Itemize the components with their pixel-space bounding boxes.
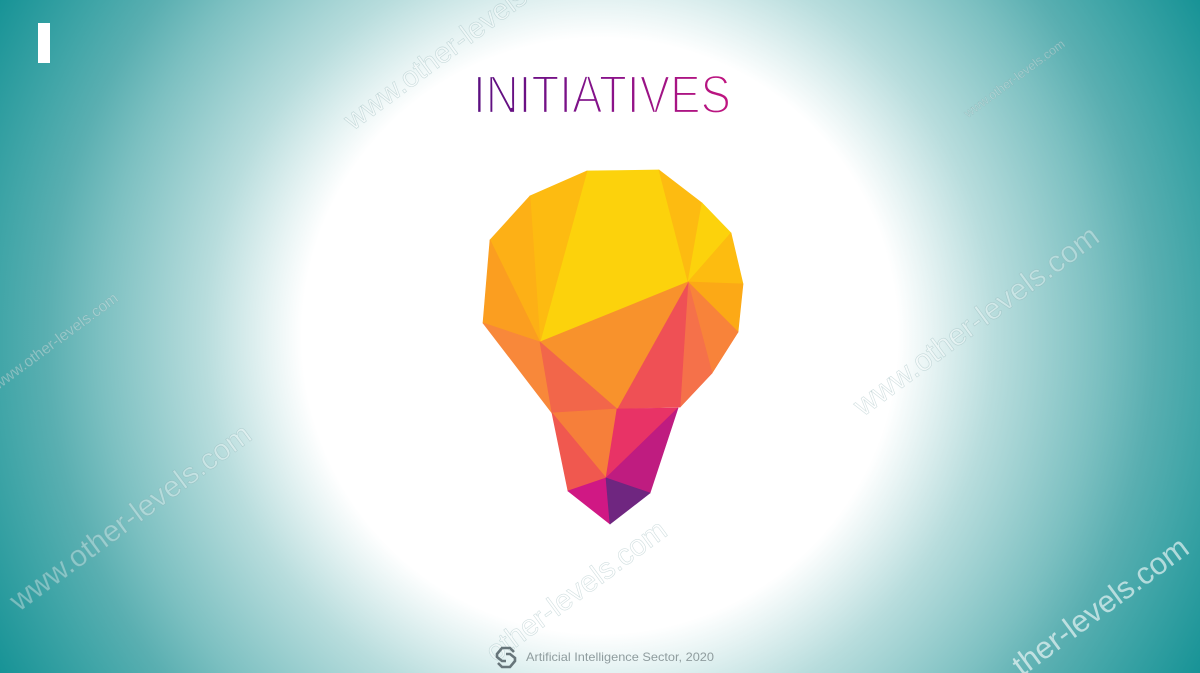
footer logo <box>497 648 515 667</box>
section marker bar <box>38 23 50 63</box>
footer text: Artificial Intelligence Sector, 2020 <box>526 650 714 664</box>
title: INITIATIVES <box>473 65 731 125</box>
watermarks: www.other-levels.com <box>846 219 1106 423</box>
watermarks: www.other-levels.com <box>3 418 258 618</box>
watermarks: www.other-levels.com <box>961 37 1068 121</box>
icon: low-poly light bulb <box>483 170 743 524</box>
watermarks: other-levels.com <box>480 513 673 669</box>
